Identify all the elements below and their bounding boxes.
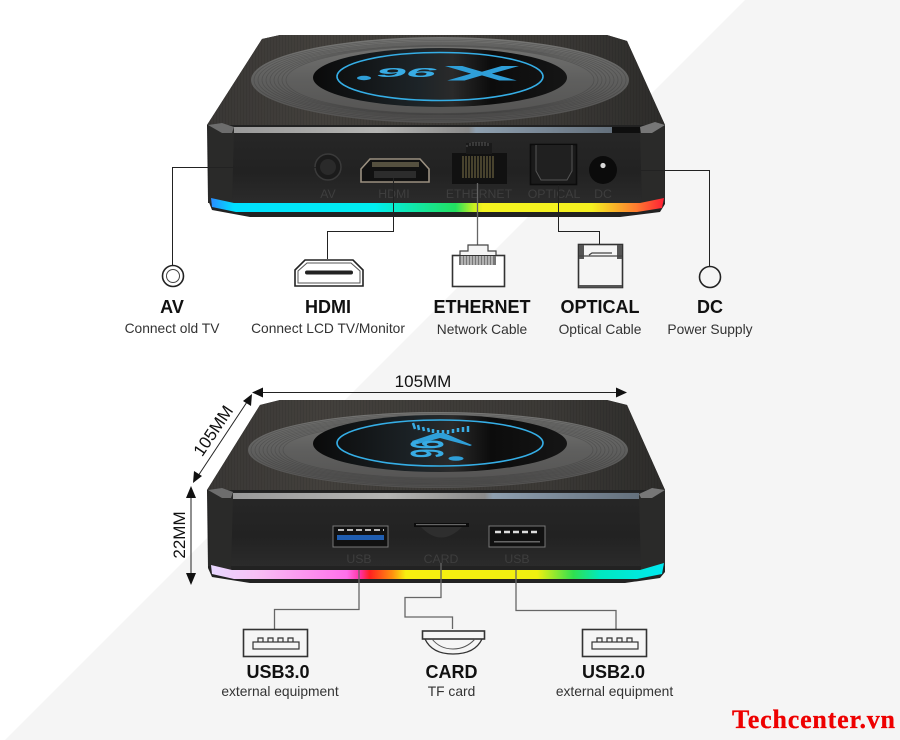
icon: DC jack	[700, 266, 720, 288]
description: Power Supply	[667, 322, 753, 337]
connector: AV	[125, 168, 316, 336]
leader line	[172, 168, 316, 265]
port: USB 2.0: USB	[504, 552, 530, 566]
icon: TF card slot	[422, 631, 484, 654]
port: Optical: OPTICAL	[528, 187, 580, 201]
box body	[207, 35, 665, 217]
dimension: width 105MM	[252, 372, 627, 398]
port: USB 3.0: USB	[346, 552, 372, 566]
label: HDMI	[305, 297, 351, 317]
dimension: height 22MM: 22MM	[170, 511, 189, 559]
port: Optical	[528, 144, 580, 201]
port: DC: DC	[594, 187, 612, 201]
LED light strip	[211, 198, 664, 212]
port: Ethernet: ETHERNET	[446, 187, 513, 201]
port: HDMI	[361, 159, 429, 201]
concentric ring on top	[251, 37, 629, 123]
connector: USB 3.0	[221, 570, 359, 699]
description: Network Cable	[437, 322, 528, 337]
dimension: depth 105MM	[190, 394, 252, 483]
central disc with X96 logo: 96	[376, 65, 438, 79]
leader line	[516, 570, 616, 629]
dimension: width 105MM: 105MM	[395, 372, 451, 391]
icon: Toslink plug	[578, 244, 622, 288]
port: TF card slot	[414, 523, 469, 566]
concentric ring on top	[248, 412, 628, 488]
port: Ethernet	[446, 142, 513, 201]
box body	[207, 400, 665, 583]
label: USB3.0	[246, 662, 310, 682]
central disc with X96 logo: 96	[400, 440, 451, 458]
port: HDMI: HDMI	[378, 187, 410, 201]
connector: TF card	[405, 563, 484, 699]
description: external equipment	[221, 684, 339, 699]
leader line	[328, 178, 394, 259]
description: Optical Cable	[559, 322, 642, 337]
dimension: height 22MM	[170, 486, 196, 585]
leader line	[617, 170, 710, 266]
icon: HDMI plug	[295, 260, 363, 286]
port: AV: AV	[320, 187, 337, 201]
label: OPTICAL	[560, 297, 640, 317]
dimension: depth 105MM: 105MM	[190, 402, 237, 460]
connector: HDMI	[251, 178, 405, 336]
LED light strip	[211, 563, 664, 579]
label: USB2.0	[582, 662, 645, 682]
leader line	[405, 563, 452, 629]
description: Connect old TV	[125, 321, 220, 336]
label: AV	[160, 297, 184, 317]
TV box, side view with USB and card ports	[207, 400, 665, 583]
port: AV	[315, 154, 341, 201]
icon: USB socket	[582, 630, 646, 656]
description: external equipment	[556, 684, 673, 699]
label: ETHERNET	[433, 297, 531, 317]
central disc with X96 logo	[313, 415, 567, 472]
TV box, rear view with AV, HDMI, Ethernet, optical and DC ports	[207, 35, 665, 217]
port: USB 3.0	[333, 526, 388, 566]
leader line	[558, 185, 600, 244]
description: TF card	[428, 684, 475, 699]
icon: RJ45 plug	[452, 245, 504, 286]
brand watermark: Techcenter.vn	[732, 705, 896, 734]
icon: AV jack	[162, 266, 184, 286]
leader line	[476, 183, 478, 245]
icon: USB socket	[244, 630, 308, 656]
description: Connect LCD TV/Monitor	[251, 321, 405, 336]
port: TF card slot: CARD	[424, 552, 459, 566]
label: DC	[697, 297, 723, 317]
central disc with X96 logo	[313, 48, 567, 107]
port: USB 2.0	[489, 526, 545, 566]
connector: DC	[617, 170, 753, 337]
connector: USB 2.0	[516, 570, 673, 699]
central disc with X96 logo: X	[444, 61, 520, 85]
label: CARD	[426, 662, 478, 682]
connector: Optical	[558, 185, 642, 337]
connector: Ethernet	[433, 183, 531, 337]
leader line	[274, 570, 359, 629]
port: DC	[589, 156, 617, 201]
